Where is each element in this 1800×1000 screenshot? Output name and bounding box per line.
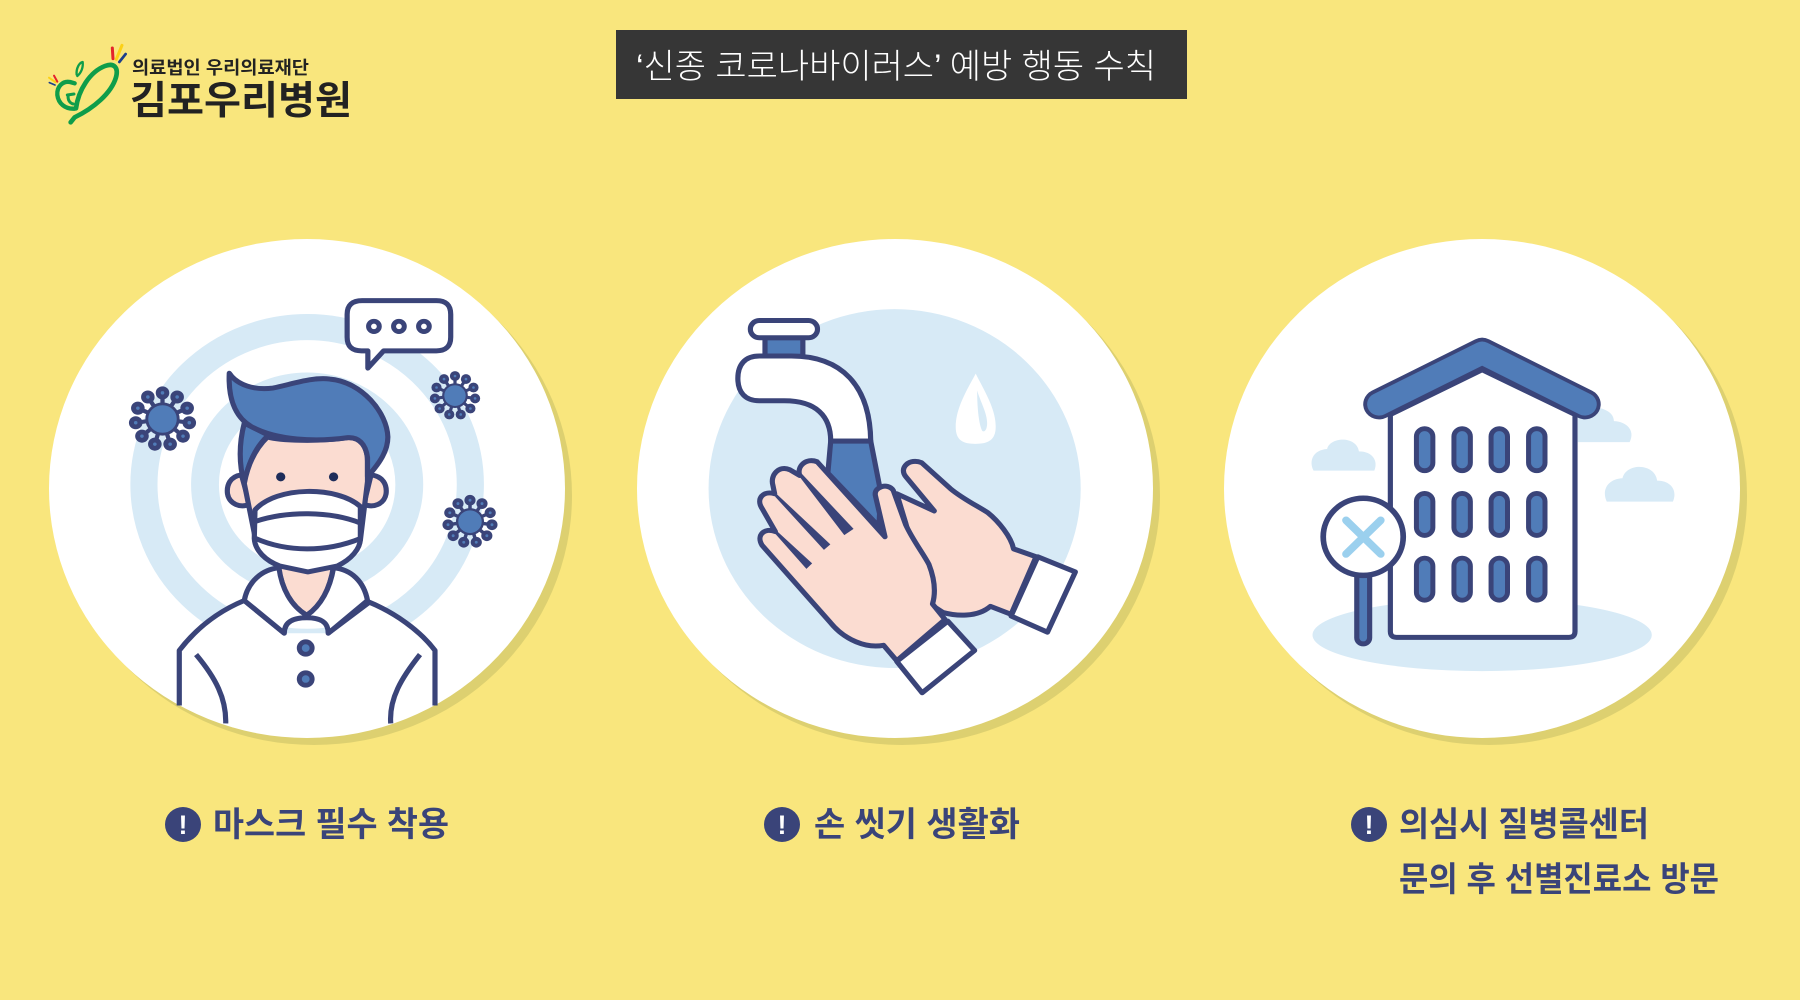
icon: faucet and hands (709, 309, 1081, 693)
buttons (299, 642, 312, 654)
white circle (637, 239, 1153, 738)
speech bubble (347, 301, 451, 368)
icon: exclamation: ! (1364, 810, 1374, 840)
panel: wearing a mask (49, 239, 572, 745)
back hair (240, 423, 269, 483)
label: mask: 마스크 필수 착용 (213, 806, 449, 844)
logo hospital name: 김포우리병원 (130, 80, 352, 123)
circle shadow (644, 246, 1160, 745)
hair (229, 373, 388, 477)
panel: screening clinic (1224, 239, 1747, 745)
icon: exclamation: ! (778, 810, 786, 840)
mask (254, 491, 360, 572)
man (179, 373, 435, 723)
icon: exclamation: ! (178, 810, 188, 840)
title banner (616, 30, 1187, 99)
eyes (276, 472, 285, 481)
right hand (897, 461, 1075, 632)
label line 2: 문의 후 선별진료소 방문 (1399, 861, 1719, 899)
virus upper right (430, 371, 480, 419)
faucet (738, 321, 881, 526)
circle shadow (56, 246, 572, 745)
white circle (1224, 239, 1740, 738)
ears (227, 475, 250, 506)
virus left (129, 386, 196, 451)
logo foundation name: 의료법인 우리의료재단 (132, 58, 309, 78)
label line 1: 의심시 질병콜센터 (1399, 806, 1649, 844)
left hand (760, 461, 975, 693)
windows (1416, 429, 1545, 600)
face (244, 437, 367, 540)
concentric rings (144, 327, 470, 642)
icon: masked man with viruses (129, 301, 498, 723)
icon: exclamation (764, 807, 800, 842)
no-entry sign (1323, 498, 1403, 644)
circle shadow (1231, 246, 1747, 745)
icon: exclamation (165, 807, 201, 842)
ground (1312, 599, 1652, 671)
icon: green leaf logo mark (49, 45, 126, 122)
title banner: ‘신종 코로나바이러스’ 예방 행동 수칙 (636, 48, 1156, 86)
logo: Gimpo Woori Hospital (49, 45, 352, 123)
collar (244, 568, 367, 633)
building (1390, 370, 1575, 637)
white circle (49, 239, 565, 738)
body (179, 601, 435, 706)
label: screening clinic (1351, 806, 1719, 899)
clouds (1312, 406, 1674, 502)
roof (1379, 353, 1585, 404)
light blue disc (709, 309, 1081, 668)
virus lower right (442, 495, 498, 548)
label: hand washing: 손 씻기 생활화 (814, 806, 1020, 844)
icon: exclamation (1351, 807, 1387, 842)
panel: hand washing (637, 239, 1160, 745)
water drop (956, 374, 996, 444)
neck (278, 566, 334, 615)
icon: hospital building with sign (1312, 353, 1674, 671)
